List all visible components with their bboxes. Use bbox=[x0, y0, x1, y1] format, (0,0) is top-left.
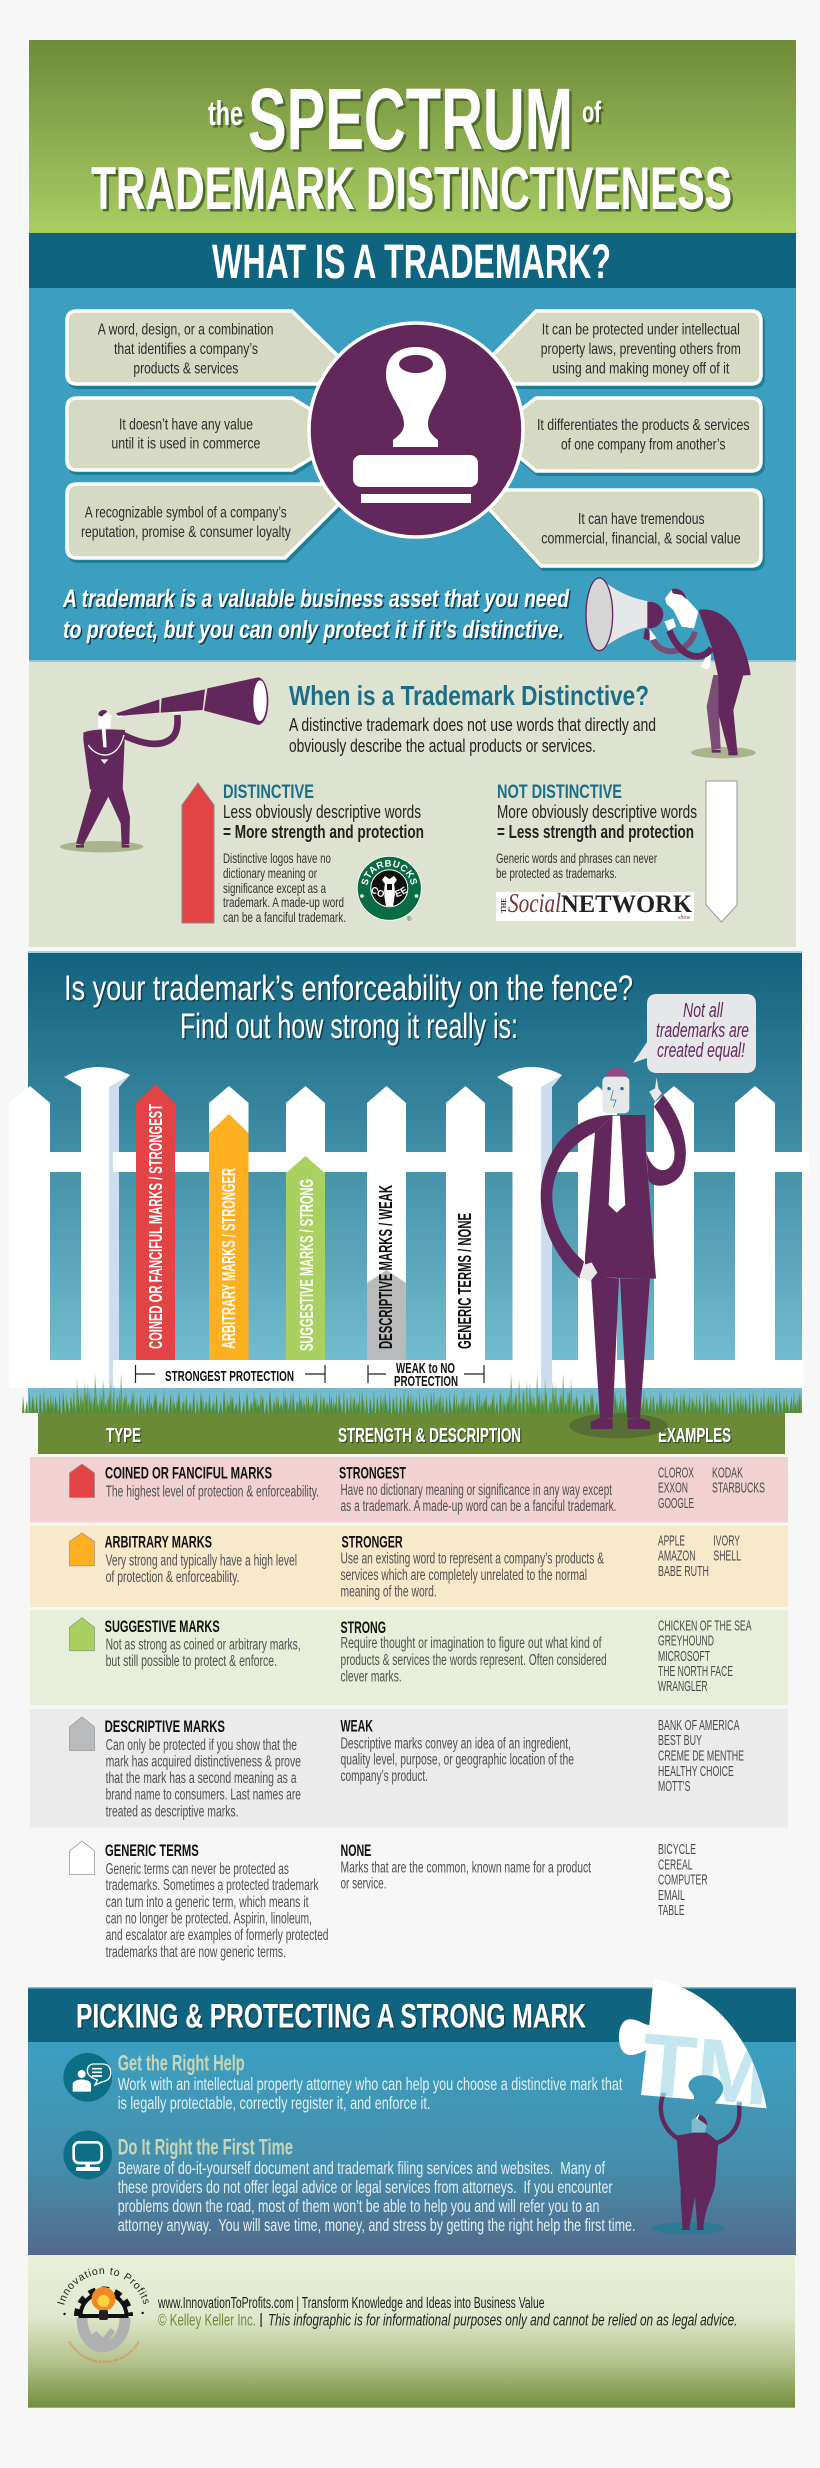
icon: innovation to profits logo: Innovation to Profits bbox=[57, 2268, 149, 2305]
text block: distinctive bbox=[223, 782, 424, 925]
text block: not distinctive: Generic words and phrases can never bbox=[496, 850, 657, 866]
icon: the social network show logo: show bbox=[678, 915, 690, 921]
row: descriptive marks: BEST BUY bbox=[658, 1733, 702, 1749]
row: generic terms: COMPUTER bbox=[658, 1872, 708, 1888]
text block: get the right help: is legally protectable, correctly register it, and enforce it. bbox=[118, 2093, 430, 2113]
row: arbitrary marks bbox=[30, 1526, 788, 1607]
panel: fence section bbox=[9, 951, 809, 1413]
row: arbitrary marks: meaning of the word. bbox=[340, 1583, 437, 1600]
row: descriptive marks: HEALTHY CHOICE bbox=[658, 1764, 734, 1780]
callout: no value until used: until it is used in commerce bbox=[111, 436, 260, 453]
row: descriptive marks: WEAK bbox=[340, 1716, 373, 1735]
arrow: generic / none: GENERIC TERMS / NONE bbox=[455, 1213, 475, 1349]
callout: tremendous value: It can have tremendous bbox=[578, 511, 704, 528]
row: suggestive marks: SUGGESTIVE MARKS bbox=[105, 1617, 220, 1636]
callout: differentiates products: It differentiates the products & services bbox=[537, 417, 750, 434]
row: generic terms: BICYCLE bbox=[658, 1842, 696, 1858]
row: arbitrary marks: AMAZON bbox=[658, 1549, 696, 1565]
icon: red arrow up bbox=[182, 783, 214, 923]
row: arbitrary marks: of protection & enforceability. bbox=[106, 1569, 239, 1586]
callout: not all trademarks are created equal bbox=[633, 994, 756, 1073]
icon: starbucks logo: ® bbox=[407, 916, 412, 923]
row: generic terms: EMAIL bbox=[658, 1888, 685, 1904]
text block: not distinctive bbox=[496, 782, 697, 881]
row: arbitrary marks: BABE RUTH bbox=[658, 1564, 709, 1580]
row: coined or fanciful marks: COINED OR FANCIFUL MARKS bbox=[105, 1464, 272, 1482]
text block: get the right help: Get the Right Help bbox=[118, 2051, 245, 2076]
icon: innovation to profits logo: transform knowledge & ideas into business value bbox=[68, 2340, 140, 2363]
callout: tremendous value: commercial, financial, & social value bbox=[541, 530, 741, 547]
icon: the social network show logo: Social bbox=[508, 888, 561, 918]
heading: enforceability on the fence: Is your trademark’s enforceability on the fence? bbox=[64, 969, 633, 1008]
row: generic terms bbox=[70, 1841, 708, 1961]
text block: valuable business asset: to protect, but you can only protect it if it’s distinctive. bbox=[63, 616, 564, 644]
callout: recognizable symbol: reputation, promise & consumer loyalty bbox=[81, 524, 291, 541]
icon: the social network show logo bbox=[496, 888, 694, 921]
grass bbox=[22, 1371, 802, 1413]
text block: distinctive: can be a fanciful trademark. bbox=[223, 909, 346, 925]
callout: not all trademarks are created equal: trademarks are bbox=[656, 1020, 749, 1042]
arrow: suggestive / strong: SUGGESTIVE MARKS / STRONG bbox=[297, 1179, 317, 1351]
icon: the social network show logo: NETWORK bbox=[561, 891, 693, 918]
row: arbitrary marks: Use an existing word to represent a company’s products & bbox=[340, 1550, 604, 1567]
row: descriptive marks bbox=[30, 1709, 788, 1828]
row: descriptive marks: mark has acquired distinctiveness & prove bbox=[106, 1754, 301, 1771]
text block: distinctive: significance except as a bbox=[223, 880, 326, 896]
row: coined or fanciful marks: KODAK bbox=[712, 1465, 743, 1481]
row: coined or fanciful marks: The highest level of protection & enforceability. bbox=[106, 1483, 319, 1500]
heading: what is a trademark: WHAT IS A TRADEMARK? bbox=[212, 236, 611, 289]
row: arbitrary marks: IVORY bbox=[713, 1533, 740, 1549]
text block: do it right the first time bbox=[118, 2134, 635, 2235]
arrow: arbitrary / stronger bbox=[209, 1114, 248, 1360]
callout: a word, design, or combination: products & services bbox=[133, 360, 238, 377]
callout: a word, design, or combination bbox=[67, 311, 340, 384]
icon: starbucks logo bbox=[357, 856, 422, 923]
row: suggestive marks: CHICKEN OF THE SEA bbox=[658, 1618, 752, 1634]
row: descriptive marks: Can only be protected if you show that the bbox=[106, 1737, 297, 1754]
row: coined or fanciful marks: STRONGEST bbox=[339, 1464, 406, 1482]
row: descriptive marks: brand name to consumers. Last names are bbox=[106, 1786, 301, 1804]
row: coined or fanciful marks: GOOGLE bbox=[658, 1496, 694, 1512]
icon: starbucks logo: COFFEE bbox=[372, 886, 408, 898]
callout: not all trademarks are created equal: created equal! bbox=[657, 1040, 745, 1062]
bracket: strongest protection bbox=[136, 1365, 325, 1385]
panel: when is a trademark distinctive bbox=[29, 662, 796, 947]
text block: distinctive: Less obviously descriptive words bbox=[223, 802, 421, 822]
text block: distinctive definition: obviously describe the actual products or services. bbox=[289, 736, 596, 756]
callout: a word, design, or combination: that identifies a company’s bbox=[114, 341, 258, 358]
icon: innovation to profits logo bbox=[57, 2268, 149, 2363]
row: arbitrary marks: APPLE bbox=[658, 1533, 685, 1549]
panel: title header bbox=[29, 40, 796, 233]
bracket: weak to no protection bbox=[368, 1360, 484, 1390]
callout: no value until used bbox=[67, 398, 315, 470]
bracket: strongest protection: STRONGEST PROTECTION bbox=[165, 1368, 294, 1385]
row: descriptive marks: DESCRIPTIVE MARKS bbox=[105, 1717, 225, 1736]
row: suggestive marks: but still possible to protect & enforce. bbox=[106, 1653, 277, 1670]
panel: footer bbox=[28, 2255, 795, 2408]
row: suggestive marks: GREYHOUND bbox=[658, 1634, 714, 1650]
arrow: descriptive / weak bbox=[367, 1185, 406, 1360]
title: SPECTRUM bbox=[248, 71, 573, 168]
callout: no value until used: It doesn’t have any value bbox=[119, 416, 253, 433]
row: descriptive marks: CREME DE MENTHE bbox=[658, 1748, 744, 1764]
panel: what is a trademark bbox=[29, 233, 796, 662]
row: descriptive marks: MOTT’S bbox=[658, 1779, 690, 1795]
text block: not distinctive: NOT DISTINCTIVE bbox=[497, 782, 622, 803]
box shadows bbox=[69, 314, 763, 569]
row: suggestive marks: THE NORTH FACE bbox=[658, 1664, 733, 1680]
icon: megaphone man bbox=[586, 578, 756, 758]
table header bar: EXAMPLES bbox=[658, 1425, 731, 1447]
text block: do it right the first time: Do It Right the First Time bbox=[118, 2134, 293, 2159]
icon: rubber stamp in purple circle bbox=[309, 323, 523, 537]
heading: enforceability on the fence bbox=[64, 969, 633, 1046]
row: descriptive marks: company’s product. bbox=[340, 1768, 428, 1785]
callout: differentiates products bbox=[518, 398, 761, 471]
callout: recognizable symbol: A recognizable symbol of a company’s bbox=[85, 505, 287, 522]
row: suggestive marks bbox=[30, 1610, 788, 1705]
callout: tremendous value bbox=[490, 490, 761, 566]
row: descriptive marks: Descriptive marks convey an idea of an ingredient, bbox=[340, 1735, 571, 1752]
title: the bbox=[208, 95, 243, 133]
row: generic terms: Marks that are the common, known name for a product bbox=[340, 1859, 591, 1876]
text block: do it right the first time: attorney anyway. You will save time, money, and stress by getting the right help the first time. bbox=[118, 2215, 635, 2235]
row: descriptive marks: that the mark has a second meaning as a bbox=[106, 1770, 297, 1787]
row: suggestive marks: products & services the words represent. Often considered bbox=[340, 1652, 607, 1669]
row: coined or fanciful marks: as a trademark. A made-up word can be a fanciful trademark. bbox=[340, 1498, 616, 1515]
row: suggestive marks: clever marks. bbox=[340, 1668, 402, 1685]
text block: valuable business asset bbox=[62, 585, 570, 644]
arrow: descriptive / weak: DESCRIPTIVE MARKS / WEAK bbox=[376, 1185, 396, 1349]
row: arbitrary marks: STRONGER bbox=[342, 1532, 403, 1551]
row: generic terms: trademarks that are now generic terms. bbox=[106, 1944, 286, 1961]
bracket: weak to no protection: WEAK to NO bbox=[396, 1360, 455, 1377]
text block: get the right help: Work with an intellectual property attorney who can help you choose a distinctive mark that bbox=[118, 2074, 622, 2094]
row: generic terms: trademarks. Sometimes a protected trademark bbox=[106, 1877, 319, 1894]
arrow: coined or fanciful / strongest bbox=[136, 1084, 175, 1360]
row: generic terms: Generic terms can never be protected as bbox=[106, 1861, 289, 1878]
arrow: suggestive / strong bbox=[286, 1156, 325, 1360]
row: generic terms: and escalator are examples of formerly protected bbox=[106, 1927, 328, 1944]
callout: protected under intellectual property bbox=[490, 311, 761, 384]
text block: copyright: © Kelley Keller Inc. bbox=[158, 2311, 256, 2330]
picket fence bbox=[9, 1067, 809, 1388]
text block: do it right the first time: Beware of do-it-yourself document and trademark filing services and websites. Many of bbox=[118, 2158, 605, 2178]
arrow: coined or fanciful / strongest: COINED OR FANCIFUL MARKS / STRONGEST bbox=[146, 1104, 166, 1349]
table header bar bbox=[38, 1413, 785, 1454]
row: descriptive marks: treated as descriptive marks. bbox=[106, 1803, 238, 1820]
text block: distinctive definition bbox=[289, 715, 656, 756]
row: coined or fanciful marks: STARBUCKS bbox=[712, 1481, 765, 1497]
icon: attorney with speech bubble bbox=[63, 2053, 112, 2102]
table rows bbox=[30, 1457, 788, 1961]
row: suggestive marks: MICROSOFT bbox=[658, 1649, 710, 1665]
row: generic terms: NONE bbox=[340, 1841, 371, 1860]
callout: differentiates products: of one company from another’s bbox=[561, 436, 725, 454]
row: coined or fanciful marks bbox=[30, 1457, 788, 1522]
table header bar: STRENGTH & DESCRIPTION bbox=[338, 1425, 521, 1447]
icon: standing man pointing up bbox=[541, 1067, 686, 1438]
text block: distinctive definition: A distinctive trademark does not use words that directly and bbox=[289, 715, 656, 735]
row: descriptive marks: quality level, purpose, or geographic location of the bbox=[340, 1752, 574, 1769]
text block: valuable business asset: A trademark is a valuable business asset that you need bbox=[62, 585, 570, 613]
row: coined or fanciful marks: Have no dictionary meaning or significance in any way except bbox=[340, 1482, 612, 1499]
text block: not distinctive: More obviously descriptive words bbox=[497, 802, 697, 822]
strength arrows bbox=[136, 1084, 475, 1360]
row: suggestive marks: STRONG bbox=[340, 1618, 386, 1637]
row: generic terms: can turn into a generic term, which means it bbox=[106, 1894, 309, 1911]
row: descriptive marks: BANK OF AMERICA bbox=[658, 1718, 740, 1734]
callout: a word, design, or combination: A word, design, or a combination bbox=[98, 322, 274, 339]
text block: distinctive: Distinctive logos have no bbox=[223, 850, 331, 866]
icon: man holding tm puzzle piece: TM bbox=[638, 2014, 774, 2124]
text block: website and tagline: www.InnovationToProfits.com | Transform Knowledge and Ideas into Business Value bbox=[157, 2295, 544, 2312]
row: arbitrary marks: ARBITRARY MARKS bbox=[105, 1532, 212, 1551]
callout: protected under intellectual property: property laws, preventing others from bbox=[541, 341, 741, 358]
row: arbitrary marks: SHELL bbox=[713, 1549, 741, 1565]
icon: telescope man bbox=[60, 677, 268, 852]
text block: distinctive: trademark. A made-up word bbox=[223, 894, 344, 910]
arrow: arbitrary / stronger: ARBITRARY MARKS / STRONGER bbox=[219, 1168, 239, 1349]
row: generic terms: TABLE bbox=[658, 1903, 685, 1919]
callout: protected under intellectual property: using and making money off of it bbox=[552, 360, 730, 377]
text block: not distinctive: be protected as trademarks. bbox=[496, 865, 617, 881]
icon: computer monitor bbox=[63, 2131, 112, 2179]
heading: when is a trademark distinctive: When is a Trademark Distinctive? bbox=[289, 680, 649, 711]
row: arbitrary marks: services which are completely unrelated to the normal bbox=[340, 1567, 587, 1584]
row: coined or fanciful marks: EXXON bbox=[658, 1481, 688, 1497]
icon: white arrow down bbox=[706, 781, 737, 922]
row: suggestive marks: WRANGLER bbox=[658, 1679, 708, 1695]
title bbox=[91, 71, 732, 222]
text block: do it right the first time: these providers do not offer legal advice or legal services from attorneys. If you encounter bbox=[118, 2177, 613, 2197]
text block: get the right help bbox=[118, 2051, 622, 2113]
heading: enforceability on the fence: Find out how strong it really is: bbox=[180, 1007, 518, 1046]
icon: man holding tm puzzle piece bbox=[619, 1978, 774, 2234]
row: generic terms: GENERIC TERMS bbox=[105, 1841, 199, 1860]
row: suggestive marks: Require thought or imagination to figure out what kind of bbox=[340, 1635, 602, 1652]
row: suggestive marks: Not as strong as coined or arbitrary marks, bbox=[106, 1636, 301, 1654]
title: of bbox=[582, 96, 602, 129]
row: arbitrary marks: Very strong and typically have a high level bbox=[106, 1552, 297, 1569]
callout: not all trademarks are created equal: Not all bbox=[683, 1000, 723, 1022]
panel: picking and protecting a strong mark bbox=[28, 1978, 796, 2255]
bracket: weak to no protection: PROTECTION bbox=[394, 1373, 458, 1390]
callout: protected under intellectual property: It can be protected under intellectual bbox=[542, 322, 740, 339]
text block: do it right the first time: problems down the road, most of them won’t be able to help you and will refer you to an bbox=[118, 2196, 599, 2216]
row: generic terms: CEREAL bbox=[658, 1858, 692, 1874]
icon: starbucks logo: STARBUCKS bbox=[362, 860, 417, 885]
icon: the social network show logo: THE bbox=[500, 898, 508, 913]
table header bar: TYPE bbox=[106, 1425, 141, 1447]
text block: not distinctive: = Less strength and protection bbox=[497, 822, 694, 842]
text block: distinctive: DISTINCTIVE bbox=[223, 782, 314, 803]
separator bbox=[260, 2313, 262, 2327]
heading: picking and protecting: PICKING & PROTECTING A STRONG MARK bbox=[76, 1998, 586, 2036]
row: generic terms: can no longer be protected. Aspirin, linoleum, bbox=[106, 1910, 312, 1928]
text block: distinctive: dictionary meaning or bbox=[223, 865, 317, 881]
row: coined or fanciful marks: CLOROX bbox=[658, 1465, 694, 1481]
row: generic terms: or service. bbox=[340, 1876, 386, 1893]
callout: recognizable symbol bbox=[67, 484, 340, 558]
text block: distinctive: = More strength and protection bbox=[223, 822, 424, 842]
